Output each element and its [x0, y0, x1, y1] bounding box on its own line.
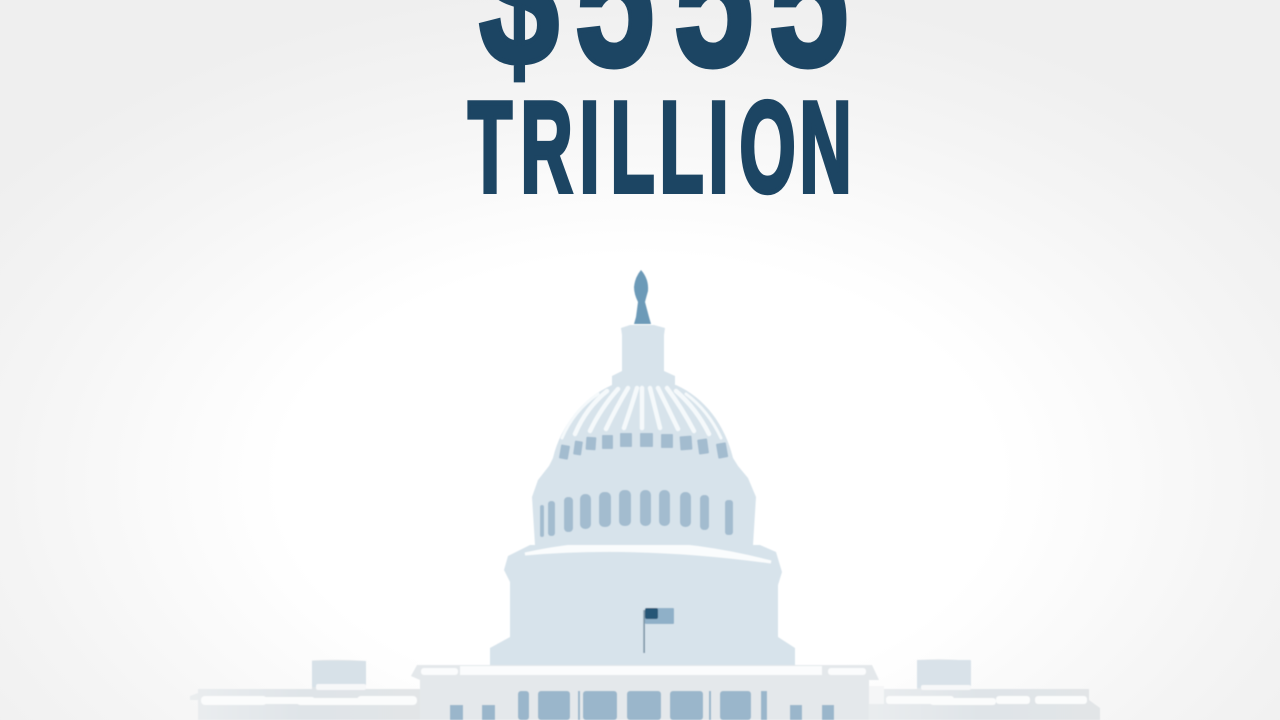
dome: [532, 270, 756, 545]
central building: [411, 665, 879, 720]
dome shell: [532, 385, 756, 545]
rotunda drum: [490, 543, 795, 665]
upper dome windows: [559, 433, 728, 460]
windows: [450, 691, 834, 720]
drum windows: [540, 490, 733, 537]
title: [468, 0, 852, 220]
right wing: [860, 659, 1100, 720]
title: TRILLION: [468, 76, 852, 220]
dome ribs: [562, 388, 721, 438]
left wing: [190, 660, 420, 720]
illustration: capitol building: [190, 270, 1100, 720]
lantern and statue: [612, 270, 675, 388]
flag: [643, 608, 674, 653]
white ledge: [525, 543, 771, 562]
